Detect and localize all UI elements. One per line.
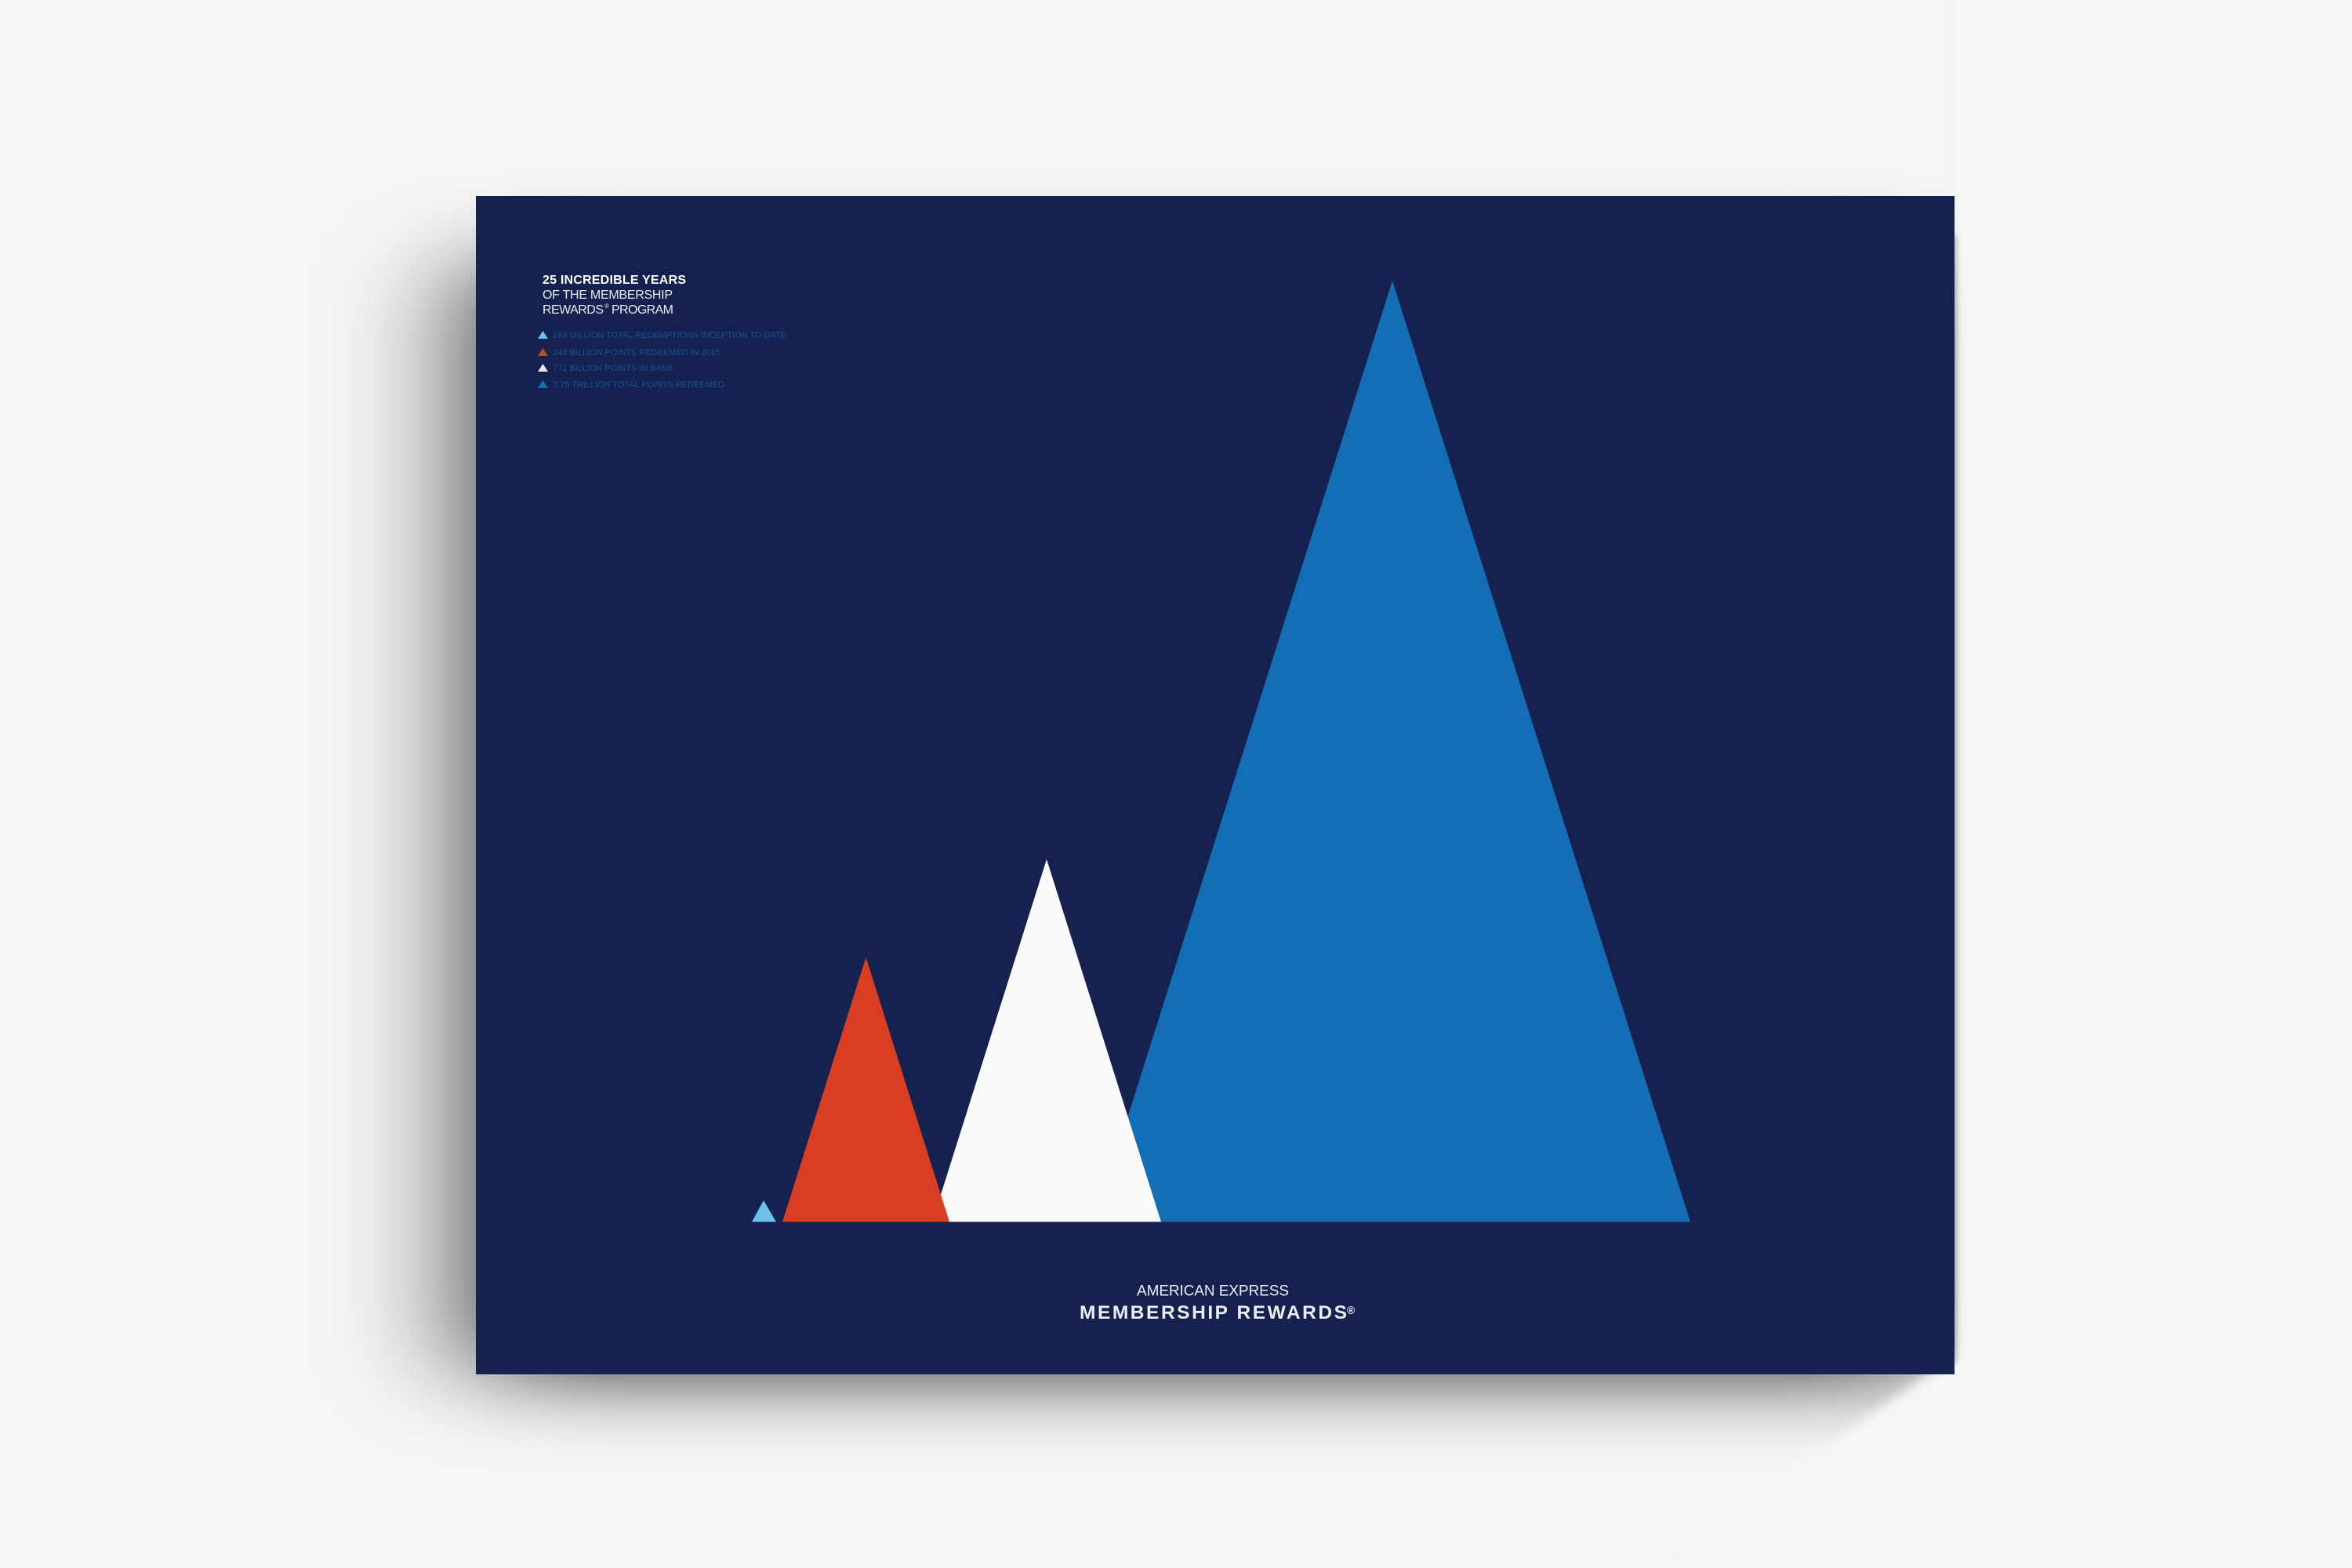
title: PROGRAM	[612, 303, 673, 317]
title: REWARDS	[543, 303, 604, 317]
footer logo text	[1080, 1283, 1356, 1323]
navy poster panel	[476, 196, 1955, 1374]
footer logo text: MEMBERSHIP REWARDS	[1080, 1302, 1347, 1323]
triangle: 184 million total redemptions	[752, 1200, 776, 1221]
legend row: points redeemed in 2015: 248 BILLION POINTS REDEEMED IN 2015	[553, 348, 720, 358]
footer logo text: ®	[1347, 1304, 1356, 1316]
title: 25 INCREDIBLE YEARS	[543, 274, 686, 287]
triangle: 771 billion points in bank	[932, 859, 1161, 1221]
legend	[538, 331, 786, 390]
legend row: redemptions: 184 MILLION TOTAL REDEMPTIONS INCEPTION TO DATE	[553, 331, 786, 340]
panel shadow	[476, 264, 1934, 1374]
legend row: total points redeemed: 3.75 TRILLION TOTAL POINTS REDEEMED	[553, 380, 724, 390]
title: OF THE MEMBERSHIP	[543, 289, 673, 302]
title	[543, 274, 686, 317]
shadow diagonal cut-off	[1646, 0, 2352, 1568]
legend row: points in bank: 771 BILLION POINTS IN BANK	[553, 364, 674, 373]
triangle: 3.75 trillion total points redeemed	[1094, 281, 1690, 1221]
right edge shadow	[1952, 235, 1957, 1364]
chart: triangles sized by value	[752, 281, 1690, 1221]
title: ®	[604, 303, 609, 310]
triangle: 248 billion points redeemed in 2015	[782, 957, 949, 1221]
footer logo text: AMERICAN EXPRESS	[1137, 1283, 1289, 1300]
